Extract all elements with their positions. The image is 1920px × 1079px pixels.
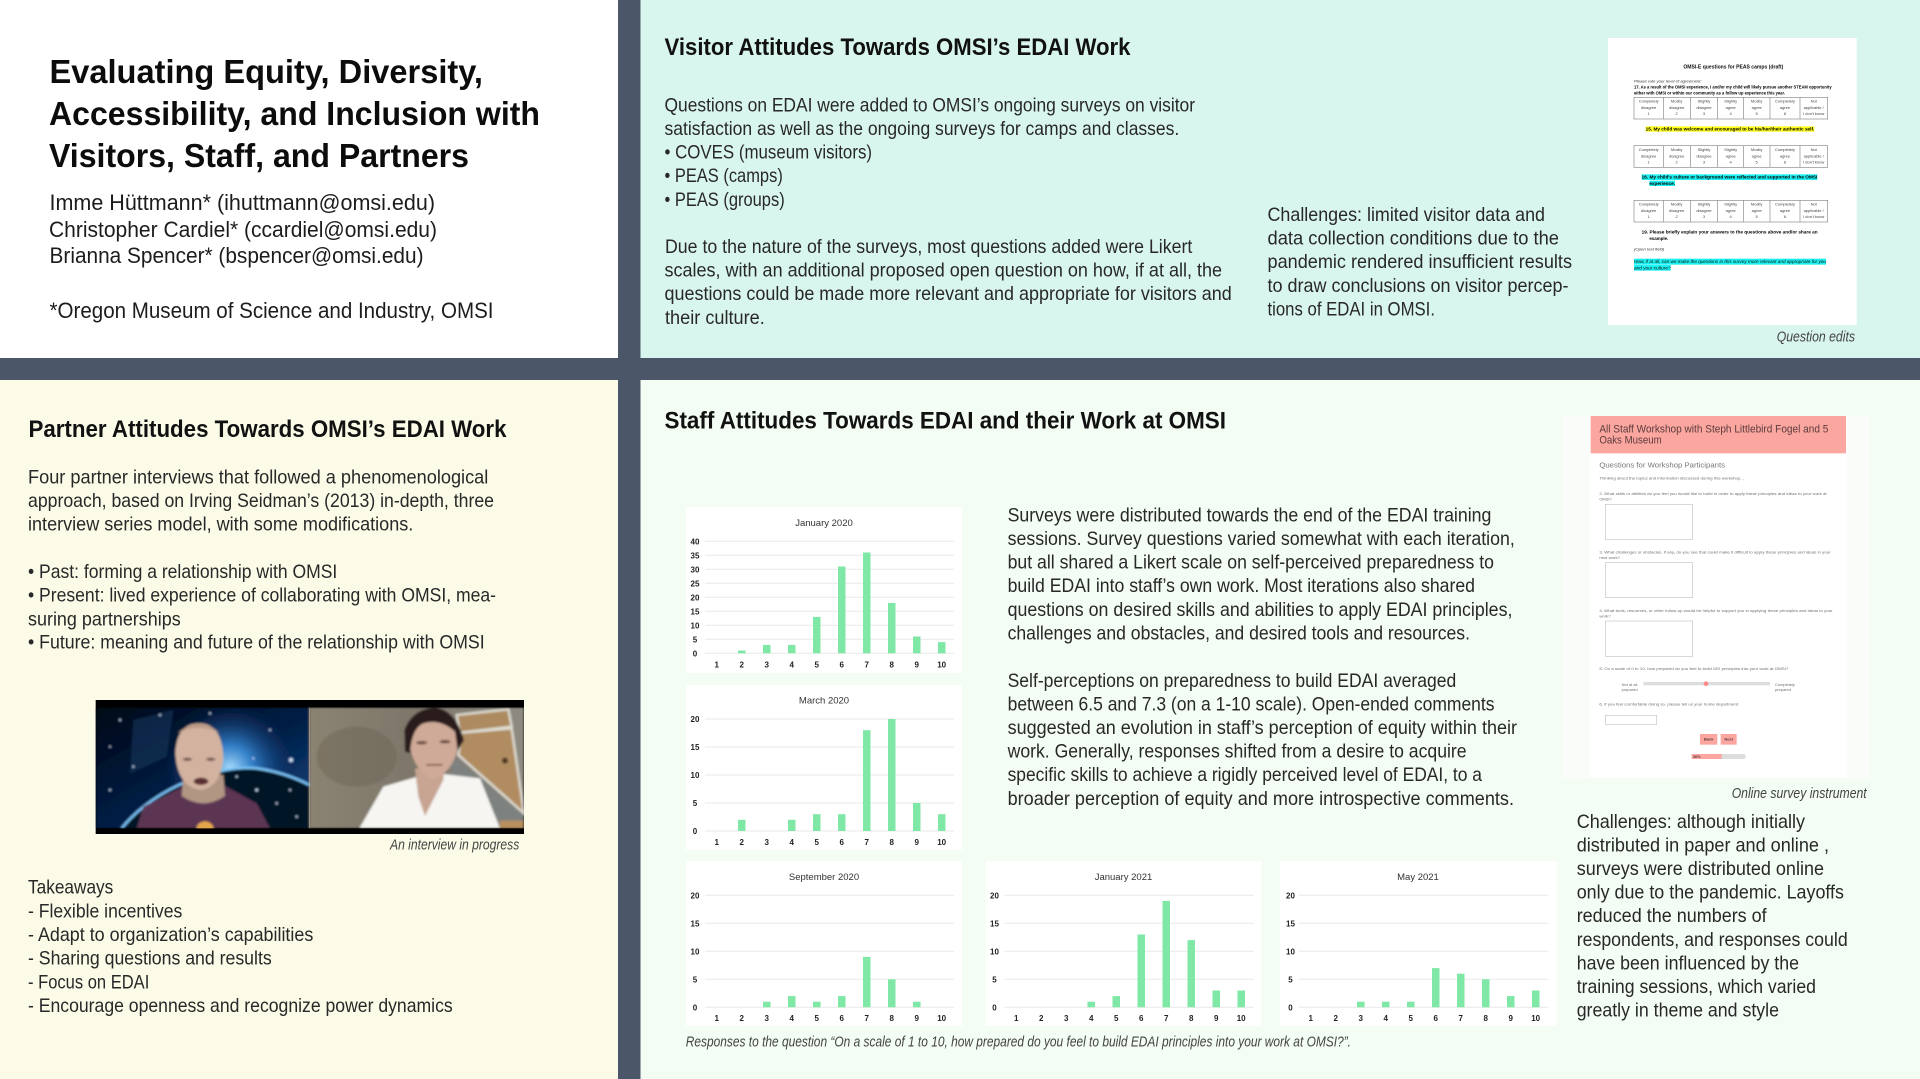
bar chart: March 2020: [686, 685, 962, 850]
bar chart: January 2020: 0: [693, 649, 698, 658]
bar chart: May 2021: 3: [1358, 1014, 1363, 1023]
image: question edits document: Mostly: [1671, 202, 1682, 207]
text block: partner interview description: • Future: meaning and future of the relationship with OMSI: [28, 632, 485, 654]
image: video interview in progress: [96, 700, 524, 837]
bar chart: March 2020: 0: [693, 827, 698, 836]
image: online survey instrument: 3. What challenges or obstacles, if any, do you see that could make it difficult to apply these principles and ideas in your: [1599, 549, 1831, 554]
text block: takeaways: - Encourage openness and recognize power dynamics: [28, 995, 453, 1017]
bar chart: January 2020: 4: [789, 661, 794, 670]
image: online survey instrument: Completely: [1775, 682, 1795, 687]
caption: question edits: Question edits: [1777, 330, 1855, 346]
text block: staff challenges: [1577, 811, 1848, 1022]
panel: title and authors: [0, 0, 618, 358]
image: question edits document: 4: [1730, 214, 1733, 219]
image: question edits document: disagree: [1641, 105, 1657, 110]
bar chart: January 2020: 35: [691, 551, 700, 560]
bar chart: September 2020: [686, 861, 962, 1026]
bar chart: March 2020: 10: [691, 771, 700, 780]
image: question edits document: 3: [1703, 214, 1706, 219]
image: question edits document: applicable /: [1804, 105, 1825, 110]
bar chart: January 2020: 1: [714, 661, 719, 670]
image: question edits document: 3: [1703, 111, 1706, 116]
bar chart: January 2021: 10: [990, 947, 999, 956]
image: question edits document: agree: [1726, 208, 1737, 213]
text block: staff survey description: suggested an evolution in staff’s perception of equity within their: [1008, 717, 1517, 739]
text block: staff survey description: but all shared a Likert scale on self-perceived preparedness to: [1008, 552, 1494, 574]
panel: visitor attitudes: [640, 0, 1920, 358]
bar chart: January 2020: 10: [691, 621, 700, 630]
image: question edits document: 19. Please briefly explain your answers to the questions above and/or share an: [1642, 229, 1818, 234]
title: [49, 53, 540, 174]
bar chart: May 2021: 4: [1383, 1014, 1388, 1023]
image: question edits document: disagree: [1669, 208, 1685, 213]
bar chart: May 2021: 5: [1288, 975, 1293, 984]
image: question edits document: 1: [1648, 214, 1651, 219]
text block: staff survey description: Surveys were distributed towards the end of the EDAI training: [1008, 504, 1491, 526]
bar chart: May 2021: 7: [1458, 1014, 1463, 1023]
text block: staff challenges: greatly in theme and style: [1577, 1000, 1779, 1022]
image: question edits document: disagree: [1696, 208, 1712, 213]
bar chart: January 2020: 6: [839, 661, 844, 670]
bar chart: September 2020: 5: [693, 975, 698, 984]
bar chart: September 2020: 4: [789, 1014, 794, 1023]
image: online survey instrument: All Staff Workshop with Steph Littlebird Fogel and 5: [1599, 423, 1828, 435]
image: question edits document: Slightly: [1724, 147, 1737, 152]
image: question edits document: experience.: [1649, 181, 1675, 186]
image: question edits document: agree: [1752, 208, 1763, 213]
bar chart: January 2021: 15: [990, 919, 999, 928]
text block: visitor challenges: tions of EDAI in OMSI.: [1268, 298, 1435, 320]
text block: partner interview description: • Present: lived experience of collaborating with OMSI, mea-: [28, 585, 496, 607]
image: question edits document: 1: [1648, 111, 1651, 116]
text block: visitor challenges: [1268, 204, 1572, 320]
image: question edits document: Slightly: [1724, 99, 1737, 104]
bar chart: January 2020: 2: [739, 661, 744, 670]
bar chart: January 2021: 2: [1039, 1014, 1044, 1023]
text block: visitor survey description: questions could be made more relevant and appropriate for visitors and: [664, 283, 1232, 305]
text block: staff survey description: broader perception of equity and more introspective comments.: [1008, 788, 1514, 810]
text block: staff challenges: surveys were distributed online: [1577, 858, 1824, 880]
text block: takeaways: - Adapt to organization’s capabilities: [28, 924, 314, 946]
image: question edits document: agree: [1752, 153, 1763, 158]
image: question edits document: 4: [1730, 159, 1733, 164]
caption: online survey: Online survey instrument: [1732, 786, 1868, 802]
bar chart: January 2021: 1: [1014, 1014, 1019, 1023]
bar chart: January 2020: 30: [691, 565, 700, 574]
bar chart: January 2021: 0: [992, 1003, 997, 1012]
image: question edits document: (Open text field): [1634, 247, 1665, 252]
image: question edits document: 16. My child's culture or background were reflected and supported in the OMSI: [1642, 174, 1817, 179]
text block: visitor survey description: [664, 94, 1232, 329]
bar chart: May 2021: 1: [1308, 1014, 1313, 1023]
bar chart: March 2020: 2: [739, 838, 744, 847]
text block: staff challenges: training sessions, which varied: [1577, 976, 1816, 998]
text block: visitor survey description: satisfaction as well as the ongoing surveys for camps and classes.: [664, 118, 1179, 140]
bar chart: January 2021: 20: [990, 891, 999, 900]
text block: takeaways: - Flexible incentives: [28, 900, 183, 922]
bar chart: January 2021: [986, 861, 1262, 1026]
image: question edits document: 5: [1756, 214, 1759, 219]
image: question edits document: 6: [1784, 159, 1787, 164]
bar chart: January 2020: 10: [937, 661, 947, 670]
image: question edits document: agree: [1752, 105, 1763, 110]
bar chart: March 2020: 7: [864, 838, 869, 847]
bar chart: January 2020: 7: [864, 661, 869, 670]
image: question edits document: and your culture?: [1634, 265, 1671, 270]
image: online survey instrument: 80%: [1693, 755, 1701, 759]
bar chart: September 2020: 1: [714, 1014, 719, 1023]
bar chart: January 2021: 4: [1089, 1014, 1094, 1023]
image: question edits document: Not: [1811, 99, 1818, 104]
image: question edits document: I don't know: [1803, 111, 1824, 116]
image: question edits document: disagree: [1641, 153, 1657, 158]
bar chart: May 2021: 6: [1433, 1014, 1438, 1023]
image: question edits document: Completely: [1639, 202, 1659, 207]
bar chart: September 2020: 15: [691, 919, 700, 928]
image: online survey instrument: 6. If you feel comfortable doing so, please tell us your home department.: [1599, 702, 1739, 707]
text block: visitor challenges: Challenges: limited visitor data and: [1268, 204, 1545, 226]
text block: takeaways: - Focus on EDAI: [28, 971, 149, 993]
image: online survey instrument: 5. On a scale of 0 to 10, how prepared do you feel to build DEI principles into your work at OMSI?: [1599, 666, 1789, 671]
bar chart: May 2021: 15: [1286, 919, 1295, 928]
bar chart: March 2020: 3: [764, 838, 769, 847]
image: question edits document: disagree: [1696, 105, 1712, 110]
image: question edits document: 5: [1756, 111, 1759, 116]
image: online survey instrument: next work?: [1599, 555, 1621, 560]
authors: Brianna Spencer* (bspencer@omsi.edu): [50, 243, 424, 268]
text block: partner interview description: suring partnerships: [28, 608, 181, 630]
image: question edits document: I don't know: [1803, 159, 1824, 164]
text block: visitor survey description: scales, with an additional proposed open question on how, if at all, the: [664, 260, 1222, 282]
bar chart: March 2020: 5: [693, 799, 698, 808]
affiliation: *Oregon Museum of Science and Industry, OMSI: [50, 298, 494, 323]
text block: staff survey description: questions on desired skills and abilities to apply EDAI principles,: [1008, 599, 1512, 621]
image: question edits document: Completely: [1775, 202, 1795, 207]
image: question edits document: agree: [1780, 105, 1791, 110]
bar chart: January 2021: 9: [1214, 1014, 1219, 1023]
image: question edits document: Mostly: [1671, 99, 1682, 104]
image: online survey instrument: 4. What tools, resources, or other follow-up would be helpful to support you in applying these principles and ideas to your: [1599, 608, 1833, 613]
bar chart: January 2021: January 2021: [1095, 872, 1152, 883]
bar chart: January 2020: 15: [691, 607, 700, 616]
image: question edits document: 2: [1676, 111, 1679, 116]
bar chart: January 2020: [686, 507, 962, 673]
image: question edits document: How, if at all, can we make the questions in this survey more relevant and appropriate for you: [1634, 259, 1827, 264]
image: question edits document: 5: [1756, 159, 1759, 164]
text block: staff challenges: distributed in paper and online ,: [1577, 834, 1829, 856]
image: online survey instrument: OMSI?: [1599, 497, 1612, 502]
text block: staff survey description: build EDAI into staff’s own work. Most iterations also shared: [1008, 575, 1475, 597]
text block: visitor challenges: pandemic rendered insufficient results: [1268, 251, 1572, 273]
text block: staff survey description: challenges and obstacles, and desired tools and resources.: [1008, 622, 1470, 644]
text block: visitor survey description: Due to the nature of the surveys, most questions added were Likert: [665, 236, 1193, 258]
authors: [49, 190, 437, 268]
bar chart: September 2020: 8: [889, 1014, 894, 1023]
bar chart: January 2021: 7: [1164, 1014, 1169, 1023]
bar chart: May 2021: 10: [1286, 947, 1295, 956]
text block: staff survey description: work. Generally, responses shifted from a desire to acquire: [1007, 741, 1467, 763]
bar chart: March 2020: 6: [839, 838, 844, 847]
image: question edits document: Not: [1811, 147, 1818, 152]
text block: staff survey description: specific skills to achieve a rigidly perceived level of EDAI, to a: [1008, 764, 1482, 786]
image: question edits document: applicable /: [1804, 153, 1825, 158]
bar chart: May 2021: [1280, 861, 1557, 1026]
bar chart: March 2020: 1: [714, 838, 719, 847]
image: online survey instrument: prepared: [1622, 687, 1638, 692]
bar chart: March 2020: 15: [691, 743, 700, 752]
image: question edits document: Mostly: [1671, 147, 1682, 152]
text block: staff challenges: have been influenced by the: [1577, 952, 1799, 974]
image: question edits document: 6: [1784, 111, 1787, 116]
text block: staff survey description: [1007, 504, 1517, 810]
image: question edits document: I don't know: [1803, 214, 1824, 219]
text block: staff survey description: between 6.5 and 7.3 (on a 1-10 scale). Open-ended comments: [1008, 693, 1495, 715]
image: online survey instrument: Questions for Workshop Participants: [1599, 460, 1725, 469]
image: online survey instrument: 2. What skills or abilities do you feel you would like to build in order to apply these principles and ideas to your work at: [1599, 491, 1828, 496]
image: question edits document: disagree: [1669, 105, 1685, 110]
image: question edits document: disagree: [1696, 153, 1712, 158]
bar chart: March 2020: 5: [814, 838, 819, 847]
image: question edits document: Slightly: [1698, 202, 1710, 207]
bar chart: May 2021: 0: [1288, 1003, 1293, 1012]
bar chart: March 2020: 20: [691, 715, 700, 724]
bar chart: January 2020: January 2020: [795, 518, 853, 529]
text block: staff survey description: Self-perceptions on preparedness to build EDAI averaged: [1008, 670, 1456, 692]
image: question edits document: Completely: [1775, 99, 1795, 104]
text block: partner interview description: approach, based on Irving Seidman’s (2013) in-depth, three: [28, 490, 494, 512]
image: question edits document: agree: [1726, 153, 1737, 158]
bar chart: January 2021: 8: [1189, 1014, 1194, 1023]
bar chart: January 2020: 25: [691, 579, 700, 588]
caption: chart question: Responses to the question “On a scale of 1 to 10, how prepared do you feel to build EDAI principles into your work at OMSI?”.: [686, 1035, 1351, 1051]
image: question edits document: either with OMSI or within our community as a follow up experience this year.: [1634, 91, 1785, 96]
image: question edits document: example.: [1649, 236, 1668, 241]
image: question edits document: Slightly: [1698, 99, 1710, 104]
bar chart: May 2021: May 2021: [1397, 872, 1439, 883]
authors: Christopher Cardiel* (ccardiel@omsi.edu): [49, 217, 437, 242]
bar chart: January 2021: 3: [1064, 1014, 1069, 1023]
text block: visitor survey description: their culture.: [665, 307, 765, 329]
image: online survey instrument: [1562, 415, 1870, 778]
text block: partner interview description: • Past: forming a relationship with OMSI: [28, 561, 337, 583]
image: question edits document: Slightly: [1724, 202, 1737, 207]
heading: staff attitudes: Staff Attitudes Towards EDAI and their Work at OMSI: [664, 408, 1226, 434]
text block: staff challenges: Challenges: although initially: [1577, 811, 1805, 833]
bar chart: May 2021: 10: [1531, 1014, 1541, 1023]
image: question edits document: Please rate your level of agreement:: [1634, 78, 1702, 83]
text block: visitor survey description: • PEAS (camps): [664, 165, 783, 187]
text block: visitor survey description: Questions on EDAI were added to OMSI’s ongoing surveys on visitor: [664, 94, 1195, 116]
image: question edits document: OMSI-E questions for PEAS camps (draft): [1683, 65, 1783, 71]
image: question edits document: 2: [1676, 159, 1679, 164]
bar chart: September 2020: 7: [864, 1014, 869, 1023]
bar chart: May 2021: 9: [1508, 1014, 1513, 1023]
image: question edits document: 17. As a result of the OMSI experience, I and/or my child will likely pursue another STEAM opportunity: [1634, 85, 1832, 90]
bar chart: January 2020: 40: [691, 537, 700, 546]
image: online survey instrument: Oaks Museum: [1599, 434, 1662, 446]
image: online survey instrument: Thinking about the topics and information discussed during this workshop...: [1599, 475, 1744, 480]
text block: takeaways: Takeaways: [28, 876, 114, 898]
image: question edits document: 3: [1703, 159, 1706, 164]
bar chart: September 2020: 9: [914, 1014, 919, 1023]
image: question edits document: [1608, 38, 1857, 325]
authors: Imme Hüttmann* (ihuttmann@omsi.edu): [50, 190, 435, 215]
bar chart: September 2020: 5: [814, 1014, 819, 1023]
bar chart: January 2021: 5: [992, 975, 997, 984]
text block: staff challenges: respondents, and responses could: [1577, 929, 1848, 951]
text block: takeaways: - Sharing questions and results: [28, 948, 272, 970]
image: question edits document: agree: [1726, 105, 1737, 110]
heading: visitor attitudes: Visitor Attitudes Towards OMSI’s EDAI Work: [664, 34, 1131, 61]
image: online survey instrument: work?: [1599, 614, 1611, 619]
image: question edits document: 6: [1784, 214, 1787, 219]
bar chart: September 2020: 3: [764, 1014, 769, 1023]
bar chart: March 2020: 8: [889, 838, 894, 847]
image: question edits document: Not: [1811, 202, 1818, 207]
bar chart: September 2020: September 2020: [789, 872, 859, 883]
image: question edits document: Slightly: [1698, 147, 1710, 152]
bar chart: January 2021: 6: [1139, 1014, 1144, 1023]
bar chart: March 2020: 10: [937, 838, 947, 847]
title: Accessibility, and Inclusion with: [49, 95, 540, 132]
image: question edits document: agree: [1780, 153, 1791, 158]
bar chart: January 2020: 8: [889, 661, 894, 670]
image: question edits document: disagree: [1669, 153, 1685, 158]
text block: visitor survey description: • PEAS (groups): [664, 189, 785, 211]
text block: staff challenges: only due to the pandemic. Layoffs: [1577, 882, 1844, 904]
image: online survey instrument: Next: [1724, 737, 1734, 742]
image: question edits document: Completely: [1639, 99, 1659, 104]
bar chart: September 2020: 2: [739, 1014, 744, 1023]
bar chart: September 2020: 10: [937, 1014, 947, 1023]
image: online survey instrument: Not at all: [1622, 682, 1638, 687]
title: Visitors, Staff, and Partners: [49, 137, 469, 174]
bar chart: May 2021: 5: [1408, 1014, 1413, 1023]
image: online survey instrument: prepared: [1775, 687, 1791, 692]
text block: visitor survey description: • COVES (museum visitors): [664, 142, 872, 164]
image: question edits document: 2: [1676, 214, 1679, 219]
bar chart: March 2020: March 2020: [799, 696, 849, 706]
text block: partner interview description: Four partner interviews that followed a phenomenological: [28, 466, 488, 488]
bar chart: May 2021: 2: [1333, 1014, 1338, 1023]
image: online survey instrument: Back: [1704, 737, 1714, 742]
bar chart: May 2021: 8: [1483, 1014, 1488, 1023]
caption: interview: An interview in progress: [389, 837, 519, 853]
image: question edits document: 1: [1648, 159, 1651, 164]
bar chart: March 2020: 4: [789, 838, 794, 847]
bar chart: May 2021: 20: [1286, 891, 1295, 900]
image: question edits document: 4: [1730, 111, 1733, 116]
title: Evaluating Equity, Diversity,: [50, 53, 483, 90]
bar chart: September 2020: 10: [691, 947, 700, 956]
image: question edits document: applicable /: [1804, 208, 1825, 213]
bar chart: September 2020: 6: [839, 1014, 844, 1023]
bar chart: January 2021: 5: [1114, 1014, 1119, 1023]
image: question edits document: Mostly: [1751, 99, 1762, 104]
image: question edits document: Mostly: [1751, 202, 1762, 207]
bar chart: January 2020: 9: [914, 661, 919, 670]
bar chart: January 2021: 10: [1237, 1014, 1246, 1023]
image: question edits document: disagree: [1641, 208, 1657, 213]
text block: staff challenges: reduced the numbers of: [1577, 905, 1767, 927]
bar chart: September 2020: 20: [691, 891, 700, 900]
bar chart: March 2020: 9: [914, 838, 919, 847]
text block: staff survey description: sessions. Survey questions varied somewhat with each iteration,: [1008, 528, 1515, 550]
text block: partner interview description: [28, 466, 496, 654]
bar chart: September 2020: 0: [693, 1003, 698, 1012]
bar chart: January 2020: 20: [691, 593, 700, 602]
heading: partner attitudes: Partner Attitudes Towards OMSI’s EDAI Work: [28, 416, 507, 443]
image: question edits document: agree: [1780, 208, 1791, 213]
panel: staff attitudes: [640, 380, 1920, 1079]
panel: partner attitudes: [0, 380, 618, 1079]
bar chart: January 2020: 5: [814, 661, 819, 670]
bar chart: January 2020: 5: [693, 635, 698, 644]
text block: visitor challenges: data collection conditions due to the: [1268, 228, 1559, 250]
text block: takeaways: [28, 876, 453, 1017]
image: question edits document: 15. My child was welcome and encouraged to be his/her/their authentic self.: [1646, 126, 1814, 131]
text block: visitor challenges: to draw conclusions on visitor percep-: [1268, 275, 1568, 297]
text block: partner interview description: interview series model, with some modifications.: [28, 514, 413, 536]
image: question edits document: Completely: [1775, 147, 1795, 152]
bar chart: January 2020: 3: [764, 661, 769, 670]
image: question edits document: Completely: [1639, 147, 1659, 152]
image: question edits document: Mostly: [1751, 147, 1762, 152]
